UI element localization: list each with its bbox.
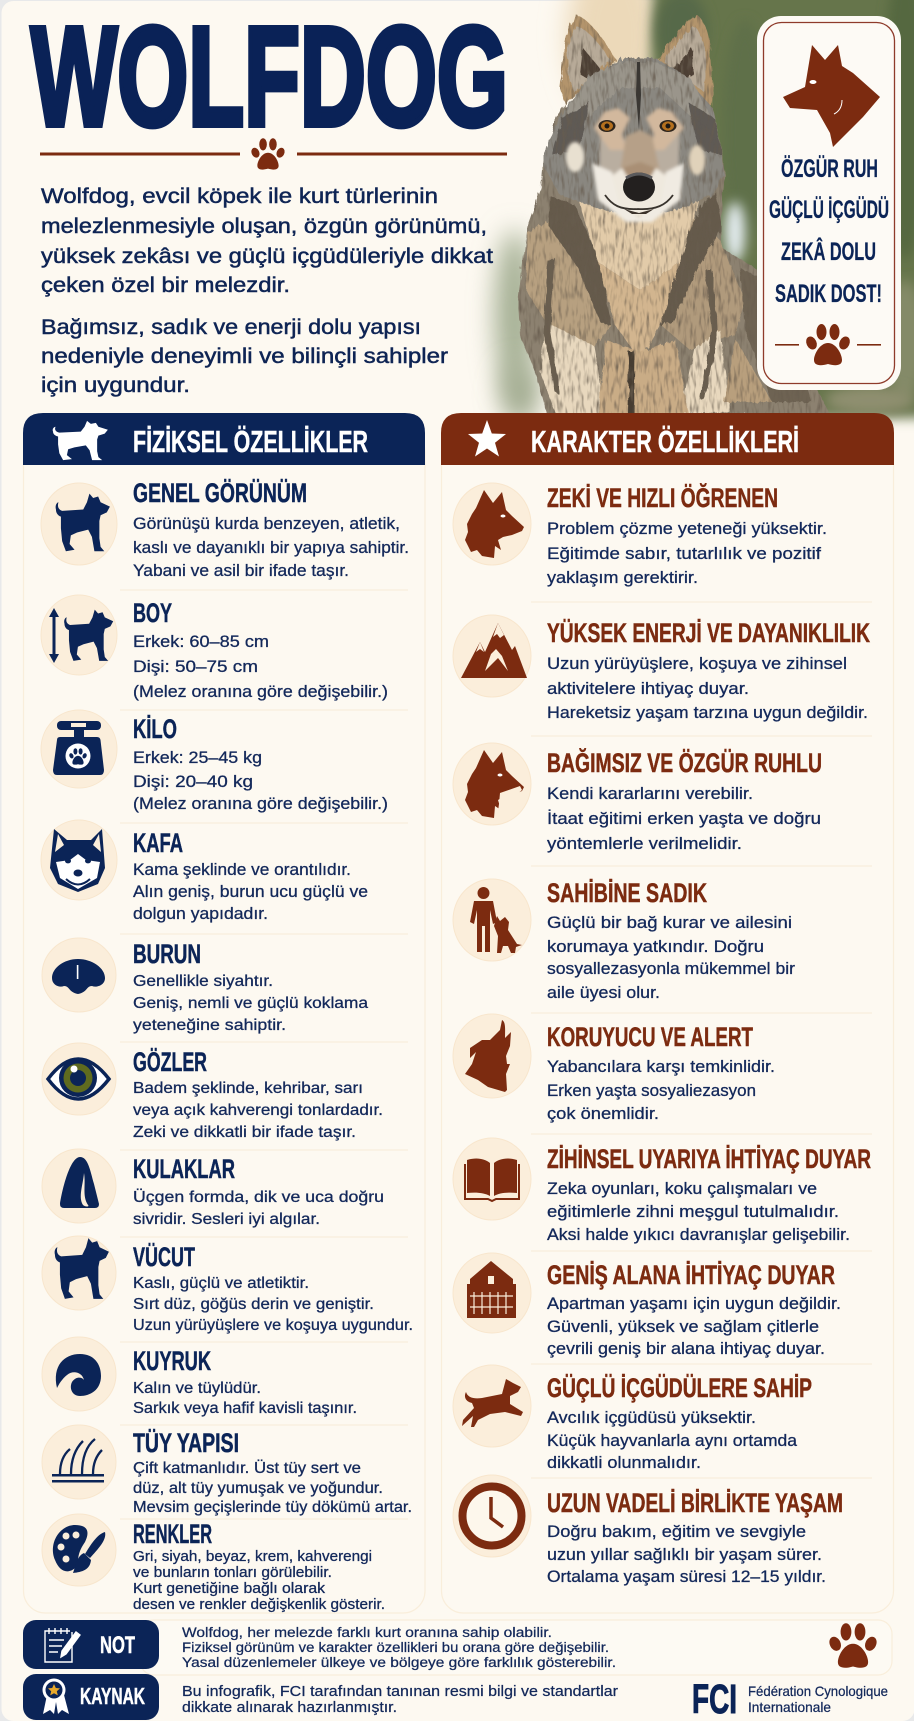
item: zihinsel [453, 1138, 871, 1244]
icon: scale [41, 710, 117, 788]
body text: düz, alt tüy yumuşak ve yoğundur. [133, 1480, 383, 1497]
body text [547, 913, 795, 1002]
icon: howling wolf [453, 1014, 531, 1098]
body text: Güçlü bir bağ kurar ve ailesini [547, 913, 792, 932]
icon: clock [453, 1475, 531, 1557]
body text: (Melez oranına göre değişebilir.) [133, 794, 388, 813]
body text: Uzun yürüyüşlere ve koşuya uygundur. [133, 1317, 413, 1334]
body text [133, 514, 409, 580]
body text: Erkek: 25–45 kg [133, 748, 262, 767]
heading: ZEKİ VE HIZLI ÖĞRENEN [547, 482, 778, 513]
item: vucut [42, 1236, 413, 1334]
FCI logo: Fédération Cynologique [748, 1683, 888, 1699]
body text [547, 1408, 798, 1472]
body text: Güvenli, yüksek ve sağlam çitlerle [547, 1317, 819, 1336]
FCI logo: Internationale [748, 1699, 831, 1715]
icon: open book [453, 1138, 531, 1220]
item: kuyruk [42, 1337, 357, 1417]
icon: dog [41, 483, 117, 565]
icon: eye [42, 1043, 116, 1115]
item: sahibine sadik [453, 878, 795, 1002]
body text [133, 1080, 383, 1141]
icon: person and dog [453, 879, 531, 961]
item: renkler [42, 1514, 385, 1613]
icon: fox head [453, 743, 531, 825]
body text [547, 654, 868, 722]
body text: dikkatli olunmalıdır. [547, 1453, 701, 1472]
body text: Üçgen formda, dik ve uca doğru [133, 1188, 384, 1206]
panel: physical traits [23, 413, 425, 1613]
source text: dikkate alınarak hazırlanmıştır. [182, 1700, 397, 1716]
body text [547, 1057, 775, 1123]
body text: Dişi: 20–40 kg [133, 772, 253, 791]
body text: çevrili geniş bir alana ihtiyaç duyar. [547, 1339, 825, 1358]
hero photo: wolf in front of blurred forest [495, 0, 914, 425]
icon: fenced house [453, 1253, 531, 1333]
body text: yöntemlerle verilmelidir. [547, 834, 742, 853]
note strip [23, 1620, 892, 1675]
icon: running dog [453, 1365, 531, 1447]
item: genis alan [453, 1253, 841, 1358]
blurred forest backdrop [495, 0, 914, 425]
intro text: Bağımsız, sadık ve enerji dolu yapısı [41, 315, 421, 339]
intro text [41, 184, 493, 397]
item: zeki [453, 482, 827, 587]
body text: Dişi: 50–75 cm [133, 657, 258, 676]
body text: ve bunların tonları görülebilir. [133, 1565, 332, 1581]
heading: SAHİBİNE SADIK [547, 878, 707, 908]
body text: Apartman yaşamı için uygun değildir. [547, 1294, 841, 1313]
badge label: KAYNAK [80, 1683, 145, 1709]
body text: korumaya yatkındır. Doğru [547, 937, 764, 956]
source badge [23, 1674, 159, 1720]
card: slogans [757, 16, 901, 390]
source text: Bu infografik, FCI tarafından tanınan resmi bilgi ve standartlar [182, 1684, 618, 1700]
item: kafa [41, 820, 368, 923]
body text [133, 860, 368, 923]
body text: yaklaşım gerektirir. [547, 568, 698, 587]
title: WOLFDOG [31, 0, 508, 155]
heading: KUYRUK [133, 1346, 211, 1376]
body text: Problem çözme yeteneği yüksektir. [547, 519, 827, 538]
body text: Uzun yürüyüşlere, koşuya ve zihinsel [547, 654, 847, 673]
icon: husky head [41, 820, 117, 900]
body text [547, 784, 821, 853]
body text: Badem şeklinde, kehribar, sarı [133, 1080, 363, 1097]
body text: aile üyesi olur. [547, 983, 660, 1002]
icon: palette [42, 1514, 116, 1586]
body text: aktivitelere ihtiyaç duyar. [547, 679, 749, 698]
body text: veya açık kahverengi tonlardadır. [133, 1102, 383, 1119]
header title: FİZİKSEL ÖZELLİKLER [133, 424, 368, 459]
item: uzun vadeli [453, 1475, 843, 1586]
paw with dashes [775, 324, 881, 365]
source text [182, 1684, 618, 1716]
body text: Geniş, nemli ve güçlü koklama [133, 995, 368, 1012]
item: kilo [41, 710, 388, 813]
intro text: nedeniyle deneyimli ve bilinçli sahipler [41, 344, 448, 368]
intro text: Wolfdog, evcil köpek ile kurt türlerinin [41, 184, 438, 208]
body text: Genellikle siyahtır. [133, 973, 273, 990]
heading: GÖZLER [133, 1047, 207, 1077]
icon: notepad [45, 1628, 80, 1662]
heading: BOY [133, 598, 172, 628]
body text: (Melez oranına göre değişebilir.) [133, 682, 388, 701]
body text: Kendi kararlarını verebilir. [547, 784, 753, 803]
body text [133, 748, 388, 813]
body text: Kalın ve tüylüdür. [133, 1380, 261, 1397]
heading: TÜY YAPISI [133, 1428, 239, 1458]
body text: Çift katmanlıdır. Üst tüy sert ve [133, 1459, 361, 1477]
body text: sivridir. Sesleri iyi algılar. [133, 1211, 320, 1228]
body text: Kurt genetiğine bağlı olarak [133, 1581, 326, 1597]
intro text: için uygundur. [41, 373, 190, 397]
note text [182, 1625, 616, 1670]
body text: yeteneğine sahiptir. [133, 1017, 286, 1034]
body text: Görünüşü kurda benzeyen, atletik, [133, 514, 400, 533]
body text [133, 1275, 413, 1334]
icon: tail [42, 1337, 116, 1411]
heading: KORUYUCU VE ALERT [547, 1022, 753, 1052]
icon: fur strands [42, 1425, 116, 1499]
note text: Yasal düzenlemeler ülkeye ve bölgeye göre farklılık gösterebilir. [182, 1655, 616, 1670]
body text [133, 1188, 384, 1228]
body text [547, 1179, 850, 1244]
icon: height [41, 595, 117, 675]
body text: dolgun yapıdadır. [133, 904, 268, 923]
body text: Sarkık veya hafif kavisli taşınır. [133, 1400, 357, 1417]
badge label: NOT [100, 1632, 135, 1659]
body text: Erken yaşta sosyaliezasyon [547, 1081, 756, 1100]
body text: desen ve renkler değişkenlik gösterir. [133, 1597, 385, 1613]
icon: dog [53, 421, 108, 460]
icon: nose [42, 938, 116, 1012]
body text: Mevsim geçişlerinde tüy dökümü artar. [133, 1499, 412, 1516]
body text: Yabancılara karşı temkinlidir. [547, 1057, 775, 1076]
FCI logo: FCI [692, 1676, 737, 1721]
body text: kaslı ve dayanıklı bir yapıya sahiptir. [133, 538, 409, 557]
body text: Hareketsiz yaşam tarzına uygun değildir. [547, 703, 868, 722]
note text: Fiziksel görünüm ve karakter özellikleri bu orana göre değişebilir. [182, 1640, 609, 1655]
body text: Zeki ve dikkatli bir ifade taşır. [133, 1124, 356, 1141]
body text: Alın geniş, burun ucu güçlü ve [133, 882, 368, 901]
body text: Erkek: 60–85 cm [133, 632, 269, 651]
heading: GENEL GÖRÜNÜM [133, 478, 307, 508]
note text: Wolfdog, her melezde farklı kurt oranına sahip olabilir. [182, 1625, 552, 1640]
item: genel gorunum [41, 478, 409, 580]
body text: Küçük hayvanlarla aynı ortamda [547, 1431, 798, 1450]
icon: mountains [453, 615, 531, 697]
body text: eğitimlerle zihni meşgul tutulmalıdır. [547, 1202, 839, 1221]
body text: Zeka oyunları, koku çalışmaları ve [547, 1179, 817, 1198]
icon: dog body [42, 1236, 116, 1310]
body text: Aksi halde yıkıcı davranışlar gelişebilir. [547, 1225, 850, 1244]
body text: Sırt düz, göğüs derin ve geniştir. [133, 1296, 374, 1313]
icon: ear [42, 1149, 116, 1223]
intro text: melezlenmesiyle oluşan, özgün görünümü, [41, 214, 487, 238]
body text [547, 1522, 826, 1586]
note badge [23, 1620, 159, 1669]
heading: KİLO [133, 714, 177, 744]
intro text: çeken özel bir melezdir. [41, 273, 290, 297]
icon: wolf head [783, 45, 880, 147]
wolf face details [566, 62, 705, 222]
body text: Kama şeklinde ve orantılıdır. [133, 860, 351, 879]
intro text: yüksek zekâsı ve güçlü içgüdüleriyle dikkat [41, 244, 493, 268]
body text: çok önemlidir. [547, 1104, 659, 1123]
body text [133, 1549, 385, 1613]
body text: Eğitimde sabır, tutarlılık ve pozitif [547, 544, 821, 563]
body text: Gri, siyah, beyaz, krem, kahverengi [133, 1549, 372, 1565]
body text: İtaat eğitimi erken yaşta ve doğru [547, 809, 821, 828]
item: boy [41, 595, 388, 701]
panel: character traits [441, 413, 894, 1613]
body text [133, 973, 368, 1034]
icon: star [468, 420, 506, 456]
item: bagimsiz [453, 743, 822, 853]
slogan lines [769, 154, 889, 308]
heading: BURUN [133, 939, 201, 969]
icon: rosette [42, 1678, 69, 1714]
panel header [23, 413, 425, 465]
item: yuksek enerji [453, 615, 870, 722]
FCI logo [692, 1676, 888, 1721]
body text: Avcılık içgüdüsü yüksektir. [547, 1408, 756, 1427]
icon: wolf head [453, 483, 531, 565]
body text: Doğru bakım, eğitim ve sevgiyle [547, 1522, 806, 1541]
body text [547, 519, 827, 587]
item: koruyucu [453, 1014, 775, 1123]
header title: KARAKTER ÖZELLİKLERİ [531, 424, 799, 459]
heading: VÜCUT [133, 1242, 195, 1272]
item: guclu icgudu [453, 1365, 812, 1472]
panel header [441, 413, 894, 465]
icon: paw [827, 1623, 879, 1668]
body text: sosyallezasyonla mükemmel bir [547, 959, 795, 978]
heading: KULAKLAR [133, 1154, 235, 1184]
body text [547, 1294, 841, 1358]
heading: KAFA [133, 828, 183, 858]
title divider with paw [40, 138, 507, 170]
item: kulaklar [42, 1149, 384, 1228]
heading: GÜÇLÜ İÇGÜDÜLERE SAHİP [547, 1373, 812, 1403]
body text: Ortalama yaşam süresi 12–15 yıldır. [547, 1567, 826, 1586]
item: gozler [42, 1043, 383, 1141]
source strip [23, 1674, 888, 1721]
body text [133, 1380, 357, 1417]
body text: Kaslı, güçlü ve atletiktir. [133, 1275, 309, 1292]
body text [133, 1459, 412, 1516]
item: burun [42, 938, 368, 1034]
heading: RENKLER [133, 1519, 212, 1549]
item: tuy yapisi [42, 1425, 412, 1516]
body text: Yabani ve asil bir ifade taşır. [133, 561, 349, 580]
body text [133, 632, 388, 701]
body text: uzun yıllar sağlıklı bir yaşam sürer. [547, 1545, 822, 1564]
wolf body and head [518, 15, 830, 414]
